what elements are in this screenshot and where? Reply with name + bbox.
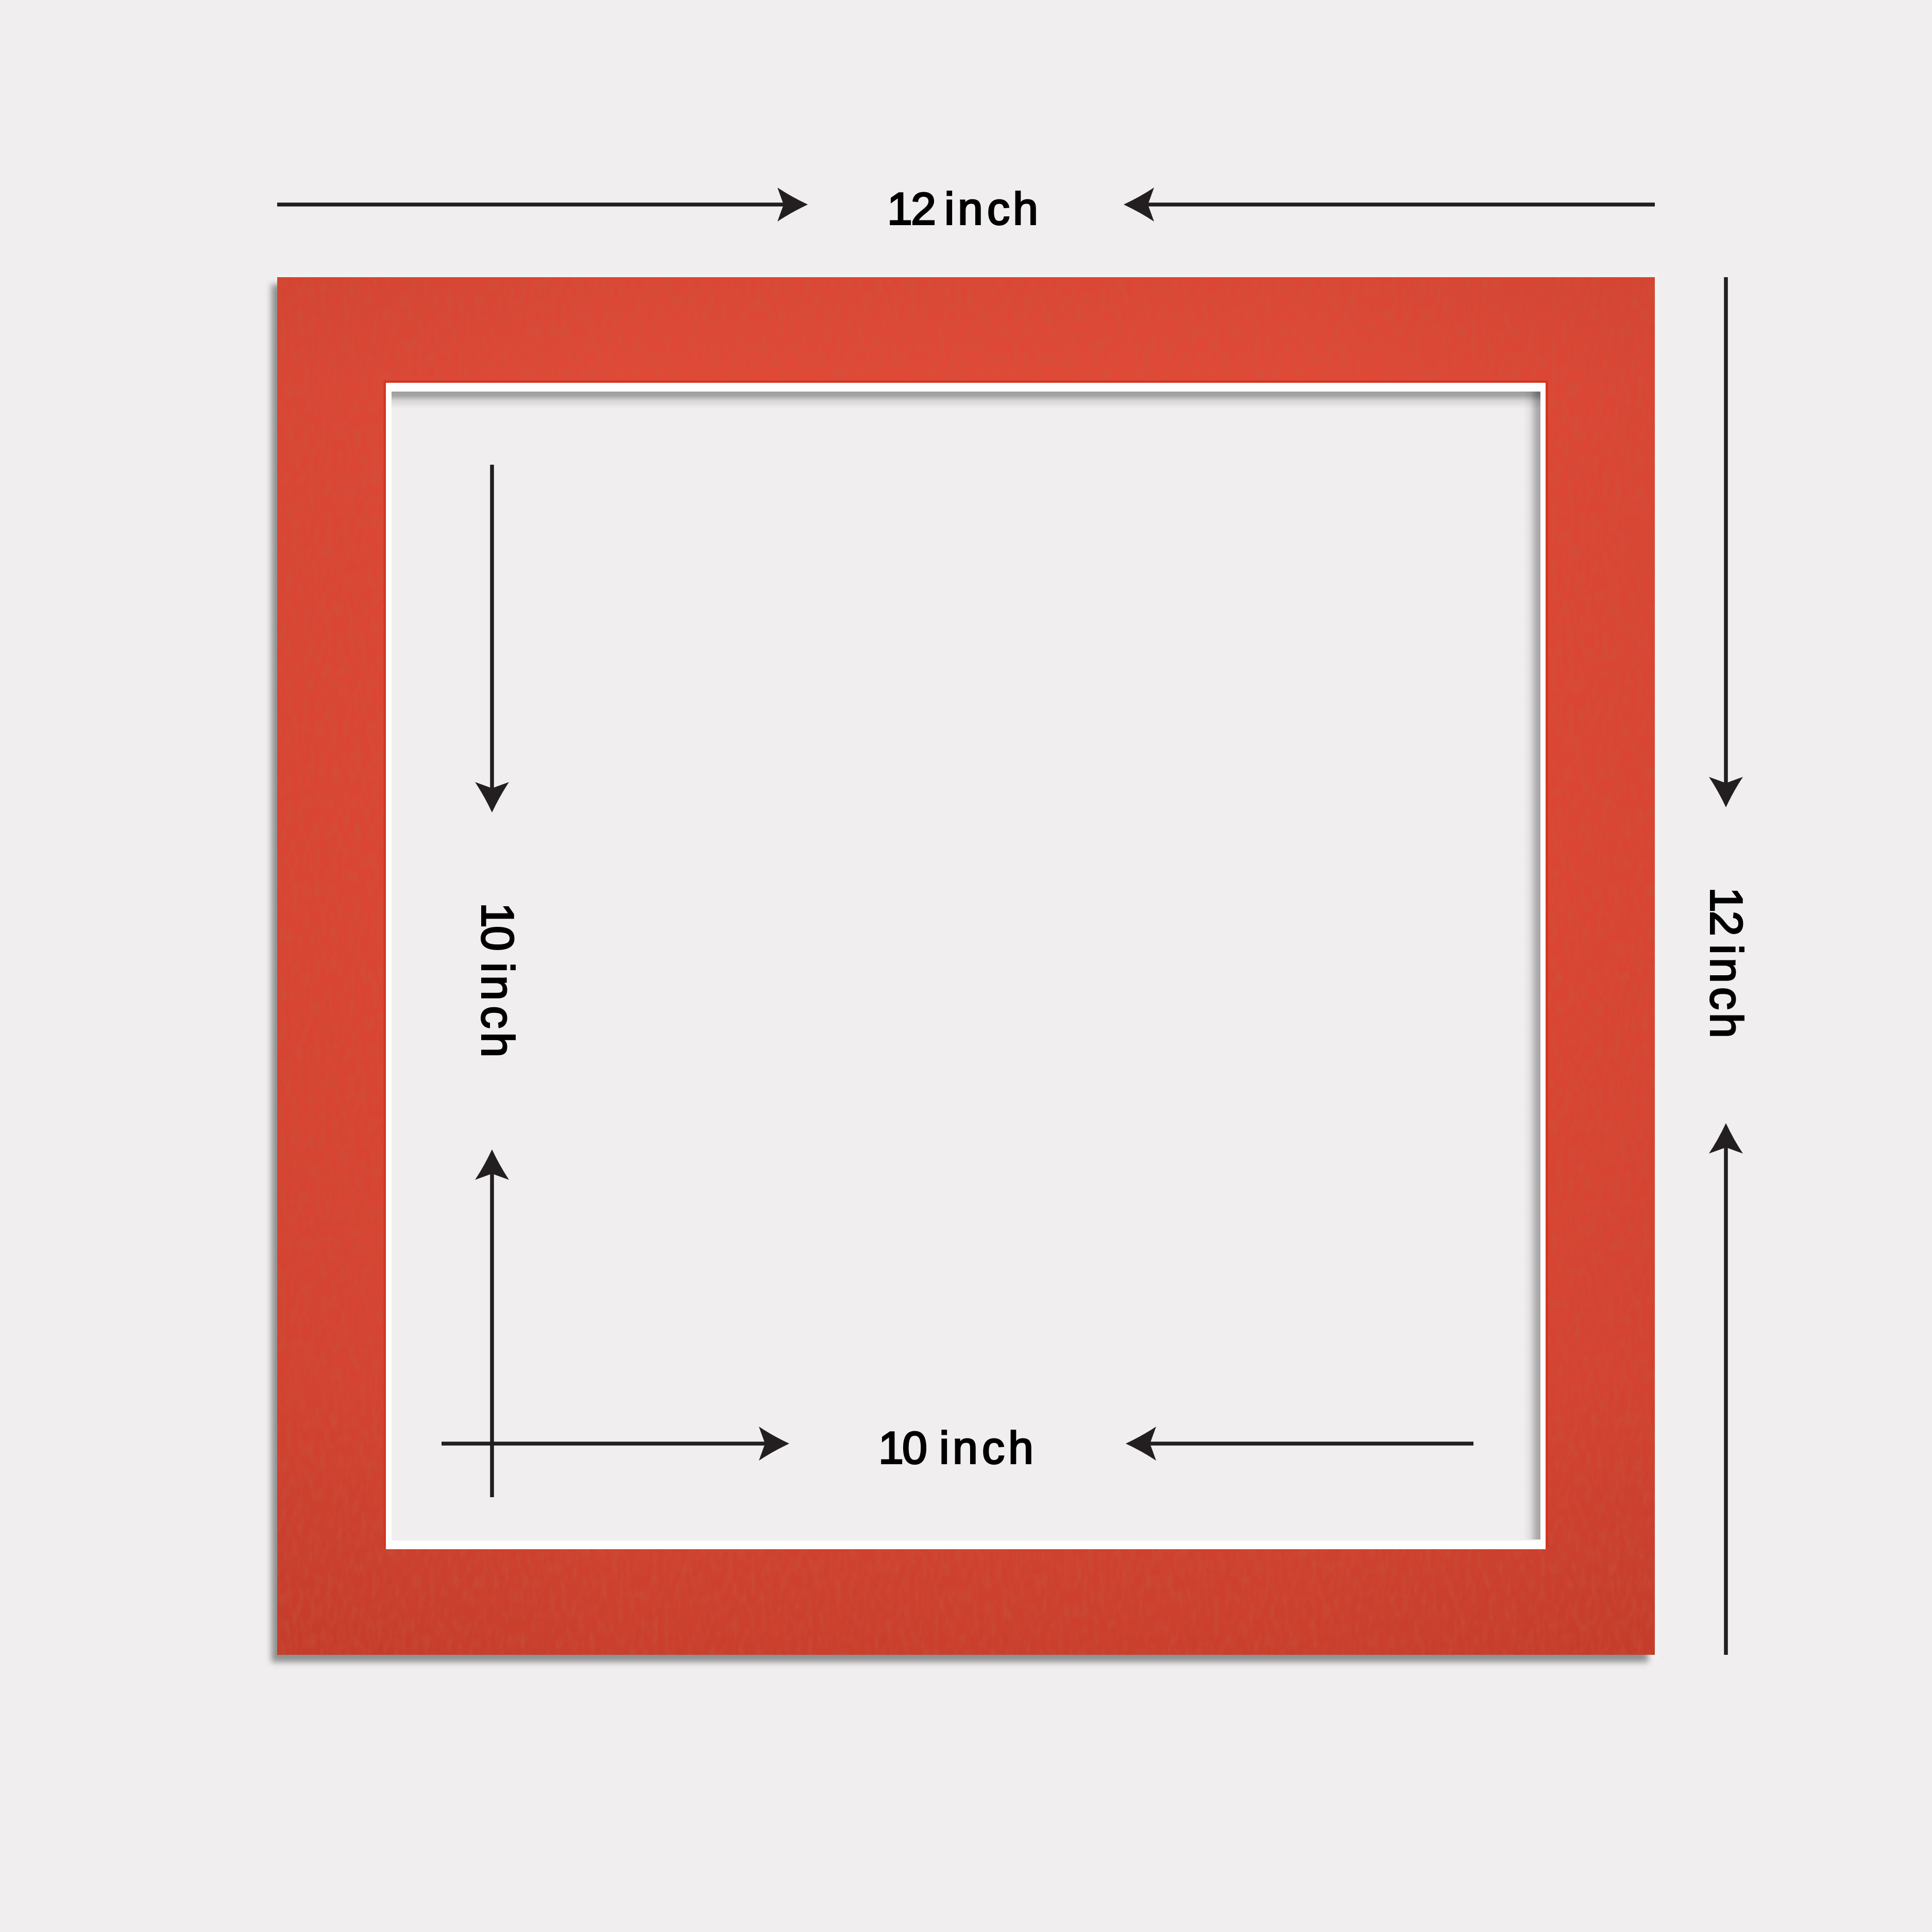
left-pointing arrow [1126, 1427, 1473, 1461]
frame drop shadow [272, 284, 1648, 1662]
up arrow [1709, 1123, 1743, 1655]
label: 12 inch [1701, 887, 1752, 1038]
right-pointing arrow [442, 1427, 789, 1461]
right dimension: 12 inch [1701, 277, 1752, 1655]
up arrow [475, 1149, 509, 1497]
mat board frame [272, 274, 1658, 1662]
down arrow [1709, 277, 1743, 807]
mat board size diagram [267, 188, 1744, 1666]
label: 10 inch [878, 1422, 1033, 1473]
label: 10 inch [472, 903, 523, 1057]
top dimension: 12 inch [277, 183, 1655, 234]
left arrow [277, 188, 808, 222]
white bevel [386, 383, 1546, 1549]
red mat board [277, 277, 1655, 1655]
opening darker cut edge [385, 382, 1547, 1548]
right arrow [1124, 188, 1655, 222]
inner bottom dimension: 10 inch [442, 1422, 1473, 1473]
frame highlight halo [275, 274, 1658, 1658]
inner left dimension: 10 inch [472, 465, 523, 1497]
down arrow [475, 465, 509, 812]
label: 12 inch [887, 183, 1038, 234]
opening interior with shadows [392, 392, 1540, 1540]
